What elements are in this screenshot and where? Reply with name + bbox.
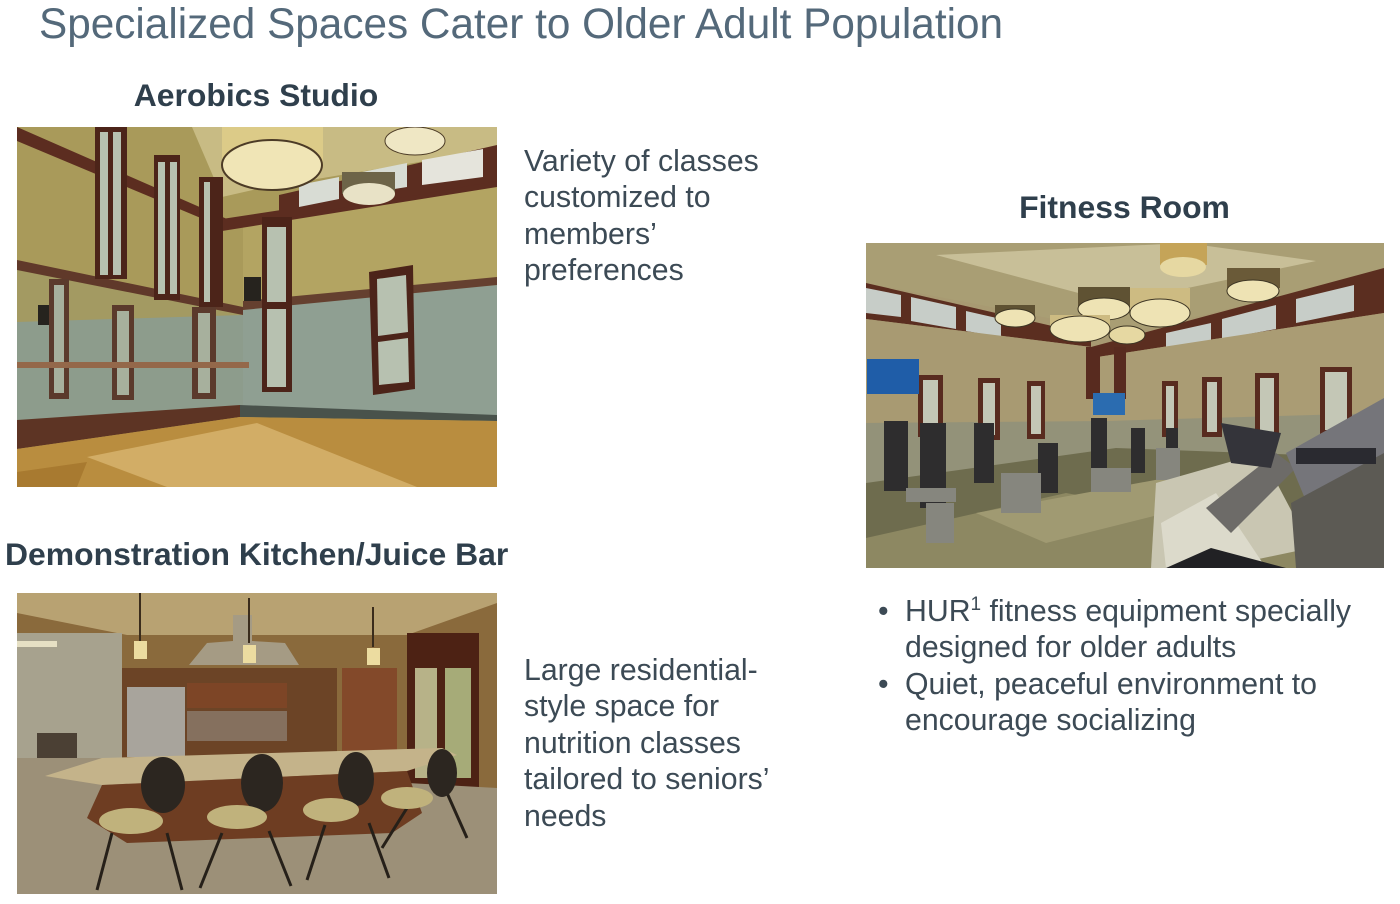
list: fitness room features: designed for older adults [905, 631, 1236, 664]
list: fitness room features [878, 594, 1351, 737]
photo: fitness room [866, 243, 1384, 568]
list: fitness room features: HUR1 fitness equipment specially [905, 594, 1351, 628]
text: kitchen description: needs [524, 800, 606, 833]
lamps [222, 127, 445, 205]
text: aerobics description [524, 145, 759, 287]
heading: aerobics studio: Aerobics Studio [134, 77, 378, 113]
list: fitness room features: Quiet, peaceful environment to [905, 668, 1317, 701]
heading: fitness room: Fitness Room [1019, 189, 1230, 225]
list: fitness room features: • [878, 595, 889, 628]
text: aerobics description: preferences [524, 254, 684, 287]
text: kitchen description: Large residential- [524, 654, 758, 687]
list: fitness room features: • [878, 668, 889, 701]
title: Specialized Spaces Cater to Older Adult Population [39, 0, 1003, 47]
lamps [995, 243, 1280, 344]
text: aerobics description: members’ [524, 218, 657, 251]
text: kitchen description: nutrition classes [524, 727, 741, 760]
text: aerobics description: customized to [524, 181, 711, 214]
text: aerobics description: Variety of classes [524, 145, 759, 178]
list: fitness room features: encourage socializing [905, 704, 1196, 737]
photo: aerobics studio [17, 127, 497, 487]
photo: demonstration kitchen [17, 593, 497, 894]
text: kitchen description: style space for [524, 690, 719, 723]
text: kitchen description: tailored to seniors’ [524, 763, 770, 796]
text: kitchen description [524, 654, 770, 833]
heading: demonstration kitchen: Demonstration Kitchen/Juice Bar [5, 536, 508, 572]
